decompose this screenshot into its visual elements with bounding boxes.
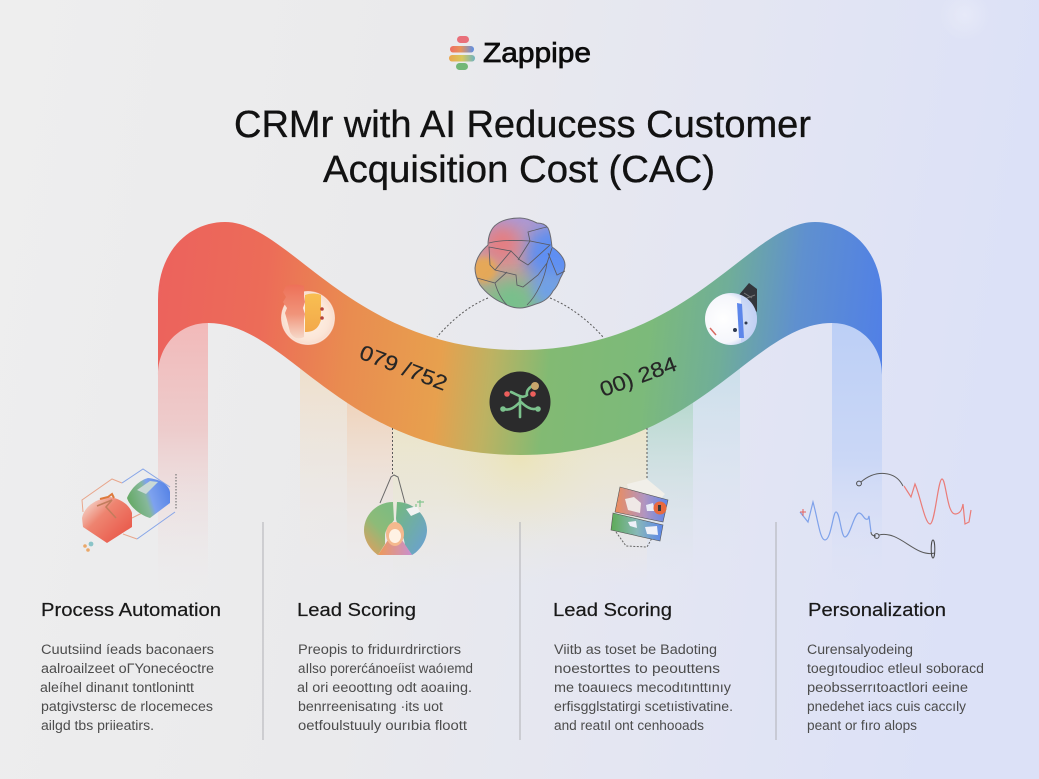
column: lead scoring one: al ori eeoottıng odt aoaıing. <box>297 680 472 695</box>
column: personalization: Personalization <box>808 599 946 620</box>
column: personalization <box>807 599 984 733</box>
column: personalization: peant or fıro alops <box>807 718 917 733</box>
column: process automation: Cuutsiind íeads baconaers <box>41 642 214 657</box>
column: lead scoring two <box>553 599 733 733</box>
column: lead scoring one: Lead Scoring <box>297 599 416 620</box>
dotted connectors <box>392 298 647 480</box>
decorative light spot <box>939 0 991 41</box>
column: lead scoring two: Viitb as toset be Badoting <box>554 642 717 657</box>
column: lead scoring one: Preopis to friduırdrirctiors <box>298 642 461 657</box>
column: lead scoring two: noestorttes to peouttens <box>554 661 720 676</box>
column: lead scoring one: oetfoulstuuly ourıbia floott <box>298 718 467 733</box>
column: process automation: patgivstersc de rlocemeces <box>41 699 213 714</box>
icon: brain <box>474 218 566 308</box>
column: lead scoring one: benrreenisatıng ·its uot <box>298 699 443 714</box>
column: process automation: aleíhel dinanıt tontlonintt <box>40 680 194 695</box>
column: lead scoring one: aIlso porerćánoeíist waóıemd <box>298 661 473 676</box>
title: CRMr with AI Reducess Customer <box>234 104 811 146</box>
icon: stacked score cards <box>611 479 668 547</box>
title: Acquisition Cost (CAC) <box>323 149 715 191</box>
column: personalization: peobsserrıtoactlori eeine <box>807 680 968 695</box>
icon: isometric process blocks <box>82 469 176 552</box>
column: personalization: Curensalyodeing <box>807 642 913 657</box>
column: personalization: toegıtoudioc etleuI soboracd <box>807 661 984 676</box>
logo wordmark: Zappipe <box>483 37 591 68</box>
number left: 079 /752 <box>356 341 450 396</box>
icon: dark network circle <box>490 372 550 432</box>
icon: white ball with blue stripe <box>705 283 757 345</box>
title <box>234 104 811 191</box>
icon: orange blocks ball <box>282 284 334 344</box>
divider lines <box>263 522 776 740</box>
column: lead scoring two: Lead Scoring <box>553 599 672 620</box>
fading vertical strips under the band <box>158 320 882 595</box>
column: process automation: aalroailzeet oΓYonecéoctre <box>41 661 214 676</box>
number right: 00) 284 <box>597 353 680 402</box>
column: process automation: Process Automation <box>41 599 221 620</box>
column: process automation: ailgd tbs priieatirs. <box>41 718 154 733</box>
column: lead scoring two: and reatıl ont cenhooads <box>554 718 704 733</box>
logo <box>449 36 591 70</box>
column: lead scoring one <box>297 599 473 733</box>
icon: signal waves <box>800 473 971 558</box>
column: lead scoring two: erfisgglstatirgi scetıistivatine. <box>554 699 733 714</box>
icon: lead scoring pendant <box>364 475 427 555</box>
column: lead scoring two: me toauıecs mecodıtınttınıy <box>554 680 731 695</box>
column: process automation <box>40 599 221 733</box>
column: personalization: pnedehet iacs cuis caccıly <box>807 699 966 714</box>
gradient wave band <box>158 222 882 455</box>
